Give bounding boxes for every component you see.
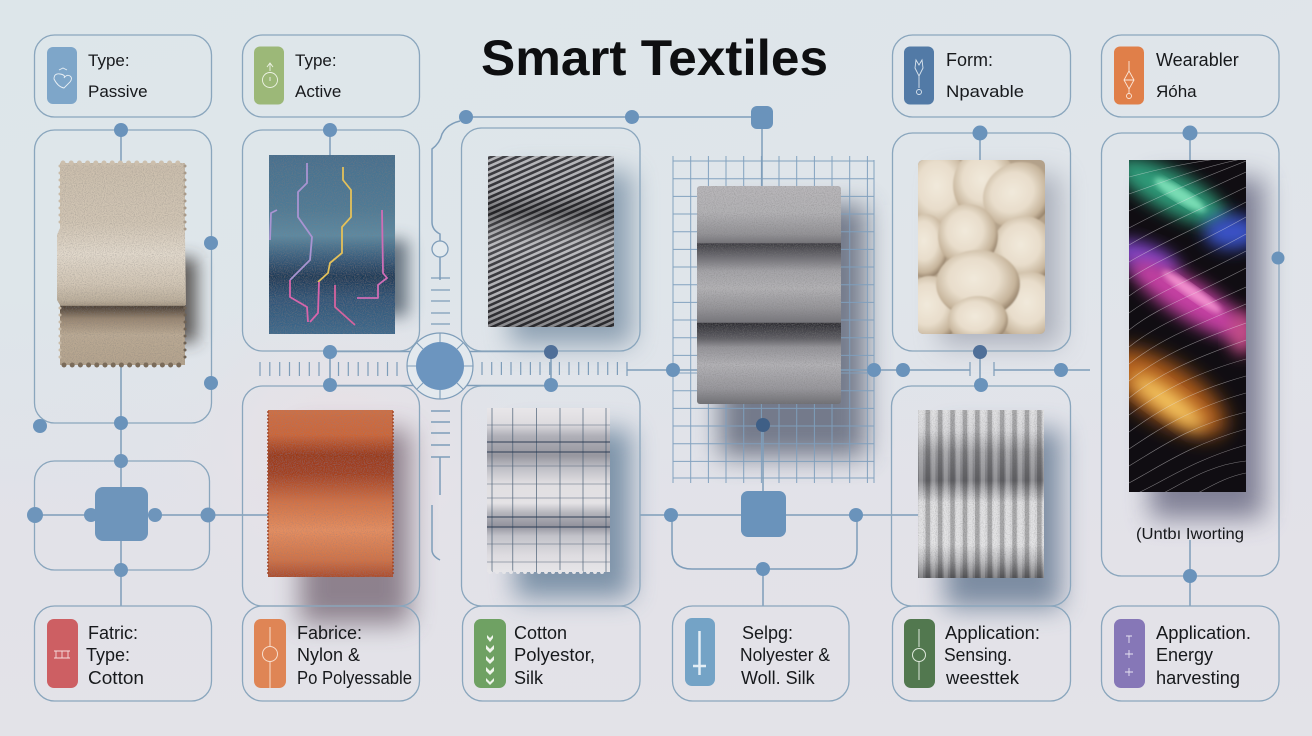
label: energy harvesting: Energy [1156, 645, 1213, 665]
panel: check fabric [462, 386, 640, 606]
label: type active [242, 35, 420, 117]
fabric drop shadows [150, 172, 1264, 624]
grid background behind gray fabric [673, 156, 874, 483]
central hub [407, 333, 473, 399]
fabric: orange sample [268, 410, 393, 577]
fabric: check sample [487, 408, 610, 572]
label: form [892, 35, 1070, 117]
panel: rib fabric [892, 386, 1070, 606]
label: nylon: Fabrice: [297, 623, 362, 643]
panel: twill fabric [460, 127, 641, 352]
panel: orange fabric [242, 386, 420, 606]
label: energy harvesting: harvesting [1156, 668, 1240, 688]
outline node on left branch [432, 241, 448, 257]
icon: passive [47, 47, 77, 104]
label: fabric type cotton: Fatric: [88, 623, 138, 643]
icon: active [254, 46, 284, 104]
label: nylon: Po Polyessable [297, 668, 412, 688]
label: wearable: Wearabler [1156, 50, 1239, 70]
label: fabric type cotton [34, 606, 212, 701]
icon: wearable [1114, 46, 1144, 104]
label: cotton polyester silk: Cotton [514, 623, 567, 643]
label: form: Form: [946, 50, 993, 70]
label: fabric type cotton: Cotton [88, 668, 144, 688]
label: sensing: Sensing. [944, 645, 1012, 665]
label: type passive: Passive [88, 82, 148, 101]
connector nodes [33, 106, 1284, 583]
fabric: rib sample [918, 410, 1044, 578]
label: energy harvesting: Application. [1156, 623, 1251, 643]
label: selpg [672, 606, 849, 701]
fabric: beige sample [57, 163, 186, 365]
icon: silk [474, 619, 506, 688]
label: sensing [892, 606, 1070, 701]
label: form: Npavable [946, 82, 1024, 101]
label: sensing: weesttek [945, 668, 1020, 688]
label: type active: Active [295, 82, 341, 101]
label: fabric type cotton: Type: [86, 645, 130, 665]
panel: active fabric [242, 130, 420, 351]
icon: form [904, 46, 934, 104]
panel: wool fabric [892, 133, 1070, 351]
label: wearable: Яóha [1156, 82, 1197, 101]
label: selpg: Selpg: [742, 623, 793, 643]
icon: energy [1114, 619, 1145, 688]
label: sensing: Application: [945, 623, 1040, 643]
label: wearable [1102, 35, 1279, 117]
icon: sensing [904, 619, 935, 688]
label: nylon [242, 606, 420, 701]
label: cotton polyester silk: Silk [514, 668, 544, 688]
label: energy harvesting [1102, 606, 1279, 701]
icon: nylon [254, 619, 286, 688]
icon: fabric [47, 619, 78, 688]
circuit connector lines [35, 117, 1190, 606]
label: cotton polyester silk [462, 606, 640, 701]
label: nylon: Nylon & [297, 645, 360, 665]
label: selpg: Nolyester & [740, 645, 830, 665]
panel: layered gray fabric [697, 186, 841, 404]
label: selpg: Woll. Silk [741, 668, 816, 688]
decorative ticks [260, 278, 994, 376]
caption: (Untbı Iworting [1136, 526, 1244, 543]
panel: energy fabric [1091, 133, 1279, 576]
fabric: twill sample [488, 156, 614, 327]
icon: selpg [685, 618, 715, 686]
fabric: iridescent sample [1129, 160, 1246, 492]
label: type active: Type: [295, 51, 337, 70]
fabric: wool sample [918, 160, 1045, 334]
label: type passive [34, 35, 212, 117]
title: Smart Textiles [481, 30, 828, 86]
label: type passive: Type: [88, 51, 130, 70]
panel: passive fabric [34, 130, 212, 423]
label: cotton polyester silk: Polyestor, [514, 645, 595, 665]
fabric: denim with conductive traces [269, 155, 395, 334]
circuit box left [27, 454, 216, 577]
